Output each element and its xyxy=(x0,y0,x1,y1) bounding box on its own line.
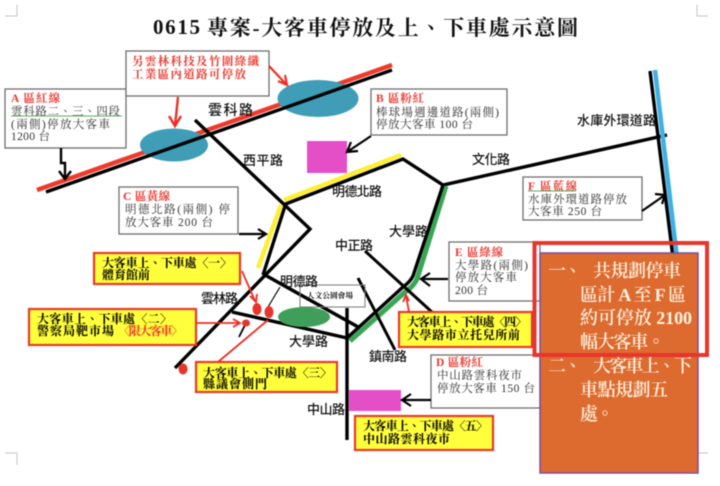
arrows: black zone pointers xyxy=(59,136,665,406)
summary panel: 共規劃停車 xyxy=(593,260,681,281)
summary panel: 幅大客車。 xyxy=(580,332,665,352)
road labels: 中山路 xyxy=(307,402,345,417)
drop-off callout 2: 警察局靶市場 xyxy=(37,323,114,338)
drop-off callout 1: 體育館前 xyxy=(102,267,150,282)
callout: zone F xyxy=(523,177,642,220)
drop-off callout 2: 大客車上、下車處〈二〉 xyxy=(37,311,172,326)
callout: zone E: 停放大客車 xyxy=(455,270,518,284)
road labels: 大學路 xyxy=(389,224,428,239)
summary panel: 二、 xyxy=(548,356,582,376)
summary panel: 一、 xyxy=(548,261,582,281)
parking ellipse: right xyxy=(278,80,358,117)
road labels: 明德北路 xyxy=(332,184,382,199)
road: 雲科路 red and black line xyxy=(37,65,392,192)
road labels: 明德路 xyxy=(280,274,318,289)
callout: zone C: C 區黃線 xyxy=(123,189,170,203)
road labels: 雲林路 xyxy=(201,291,238,306)
callout: zone A xyxy=(5,89,126,148)
parking ellipse: left xyxy=(140,128,208,162)
callout: zone F: 大客車 250 台 xyxy=(528,204,602,218)
summary panel: 車點規劃五 xyxy=(580,379,668,400)
callout: other parking areas xyxy=(126,51,269,96)
callout: zone D: 停放大客車 150 台 xyxy=(437,381,536,395)
callout: zone B xyxy=(371,89,507,135)
callout: zone D: 中山路雲科夜市 xyxy=(437,368,522,382)
callout: zone F: F 區藍線 xyxy=(528,179,578,193)
road labels: 雲科路 xyxy=(208,102,253,118)
drop-off callout 5 xyxy=(355,416,493,450)
summary panel xyxy=(540,253,698,473)
callout: zone B: B 區粉紅 xyxy=(376,91,424,105)
drop-off callout 5: 大客車上、下車處〈五〉 xyxy=(363,418,488,433)
callout: zone E: 大學路(兩側) xyxy=(455,258,528,272)
summary panel: 約可停放 2100 xyxy=(580,308,692,328)
pink parking rectangle D xyxy=(349,390,401,411)
callout: zone E: 200 台 xyxy=(455,283,488,297)
green park ellipse with label box xyxy=(278,285,365,327)
callout: other parking areas: 另雲林科技及竹圍綠纖 xyxy=(132,54,260,68)
red drop-off markers xyxy=(178,303,274,374)
road network xyxy=(175,70,677,440)
callout: zone C: 明德北路(兩側) 停 xyxy=(125,202,230,216)
red highlight frame xyxy=(534,243,707,355)
road labels: 中正路 xyxy=(335,238,373,253)
road labels: 水庫外環道路 xyxy=(577,113,656,128)
road labels: 大學路 xyxy=(289,334,328,349)
summary panel: 大客車上、下 xyxy=(593,356,692,376)
drop-off callout 2: 〈限大客車〉 xyxy=(118,323,183,338)
drop-off callout 5: 中山路雲科夜市 xyxy=(363,431,450,446)
summary panel: 處。 xyxy=(580,404,614,424)
callout: zone E xyxy=(449,242,540,301)
callout: zone B: 停放大客車 100 台 xyxy=(376,117,474,131)
callout: zone F: 水庫外環道路停放 xyxy=(528,192,628,206)
callout: zone A: 1200 台 xyxy=(11,129,50,143)
drop-off callout 4: 大學路市立托兒所前 xyxy=(407,327,520,342)
callout: zone A: A 區紅線 xyxy=(11,91,60,105)
drop-off callout 2 xyxy=(29,309,196,345)
drop-off callout 1 xyxy=(94,253,240,284)
callout: zone C: 放大客車 200 台 xyxy=(125,215,214,229)
callout: zone B: 棒球場週邊道路(兩側) xyxy=(376,105,499,119)
callout: zone A: (兩側)停放大客車 xyxy=(11,117,110,131)
title: 專案-大客車停放及上、下車處示意圖 xyxy=(207,16,578,40)
summary panel: 區計 A 至 F 區 xyxy=(580,285,686,305)
drop-off callout 4 xyxy=(399,312,532,347)
callout: zone A: 雲科路二、三、四段 xyxy=(11,104,120,118)
drop-off callout 4: 大客車上、下車處〈四〉 xyxy=(407,314,527,329)
callout: zone D xyxy=(431,355,540,408)
road labels: 西平路 xyxy=(243,153,283,168)
pink parking square B xyxy=(307,141,347,173)
arrows: red pointers xyxy=(169,66,409,362)
callout: zone D: D 區粉紅 xyxy=(436,355,484,369)
drop-off callout 3: 縣議會側門 xyxy=(203,376,267,391)
drop-off callout 3: 大客車上、下車處〈三〉 xyxy=(203,365,332,380)
road labels: 文化路 xyxy=(472,152,510,167)
callout: other parking areas: 工業區內道路可停放 xyxy=(132,67,246,81)
title: 0615 xyxy=(153,15,200,39)
green park ellipse with label box: 人文公園會場 xyxy=(307,290,354,300)
road labels: 鎮南路 xyxy=(369,349,407,364)
callout: zone E: E 區綠線 xyxy=(455,245,504,259)
drop-off callout 1: 大客車上、下車處〈一〉 xyxy=(102,255,232,270)
callout: zone C xyxy=(119,187,238,234)
road labels xyxy=(201,102,656,417)
drop-off callout 3 xyxy=(196,362,337,392)
